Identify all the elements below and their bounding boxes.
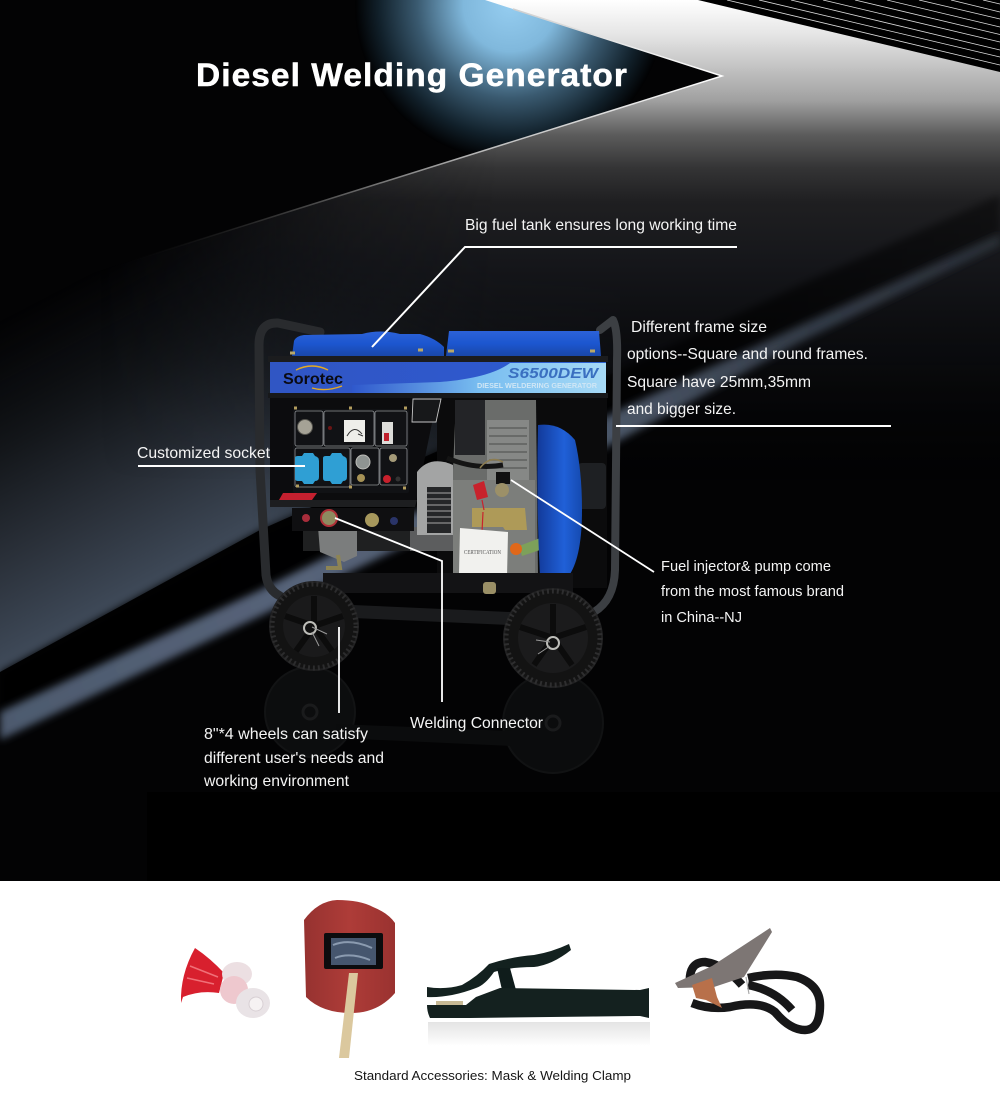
shelf bar <box>270 500 417 507</box>
callout: wheels: different user's needs and <box>204 750 384 767</box>
brass pump <box>472 508 527 530</box>
starter key <box>298 420 312 434</box>
title: Diesel Welding Generator <box>196 57 628 93</box>
control panel <box>293 408 409 493</box>
brand banner: Sorotec <box>283 371 343 388</box>
wedge edge highlights <box>128 9 722 262</box>
callout: frame size: Square have 25mm,35mm <box>627 374 811 391</box>
icon: clear nozzles <box>220 962 270 1018</box>
red tag <box>473 481 488 500</box>
main wedge shape <box>239 0 1000 442</box>
striped corner <box>698 0 1000 72</box>
accessories caption: Standard Accessories: Mask & Welding Clamp <box>354 1068 631 1083</box>
icon: welding mask <box>304 900 395 1058</box>
right wheel <box>504 589 602 687</box>
meter <box>344 420 365 442</box>
control housing <box>270 398 437 507</box>
callout: fuel tank <box>372 217 737 347</box>
mode switch and red button <box>389 454 397 462</box>
sockets <box>295 453 319 484</box>
fuel tank <box>292 332 444 356</box>
callout: fuel injector <box>511 480 844 626</box>
accessories panel <box>0 881 1000 1112</box>
dark diagonal band <box>0 195 1000 712</box>
callout: fuel injector: from the most famous brand <box>661 583 844 600</box>
callout: customized socket: Customized socket <box>137 445 271 462</box>
callout: fuel injector: in China--NJ <box>661 609 742 626</box>
cover bolts <box>290 350 595 353</box>
muffler <box>578 463 606 509</box>
engine bay backdrop <box>437 396 607 588</box>
breaker <box>382 422 393 444</box>
certification tag <box>459 528 508 577</box>
top rail <box>268 356 608 362</box>
light diagonal streak <box>0 235 1000 740</box>
panel bolts <box>294 408 407 488</box>
brand banner <box>270 362 606 393</box>
fuel pipe <box>447 458 503 466</box>
frame tubes <box>259 320 617 612</box>
knob <box>356 455 370 469</box>
red label <box>279 493 317 500</box>
engine block <box>447 400 558 577</box>
side cover <box>446 331 601 356</box>
warning sticker <box>412 399 441 422</box>
callout: welding connector <box>335 518 544 732</box>
welding terminal bar <box>292 508 414 531</box>
callout: wheels <box>203 627 384 790</box>
blue glow behind title <box>355 0 665 160</box>
callout: fuel injector: Fuel injector& pump come <box>661 558 831 575</box>
left wheel <box>270 582 358 670</box>
background panel <box>0 0 1000 744</box>
icon: electrode holder <box>427 944 650 1046</box>
brand banner: S6500DEW <box>508 365 600 382</box>
callout: welding connector: Welding Connector <box>410 715 544 732</box>
brand banner: DIESEL WELDERING GENERATOR <box>477 381 598 390</box>
green tag <box>519 532 558 556</box>
generator reflection <box>265 667 603 773</box>
callout: frame size <box>616 319 891 426</box>
icon: ground clamp <box>675 928 820 1030</box>
chassis rails <box>323 573 573 625</box>
generator <box>259 320 617 687</box>
blue fan cover <box>537 425 582 577</box>
alternator housing <box>303 461 453 568</box>
certification tag: CERTIFICATION <box>464 549 501 556</box>
icon: funnel <box>181 948 224 1003</box>
callout: frame size: and bigger size. <box>627 401 736 418</box>
callout: fuel tank: Big fuel tank ensures long working time <box>465 217 737 234</box>
slate diagonal haze <box>0 279 448 672</box>
callout: wheels: working environment <box>203 773 350 790</box>
callout: frame size: options--Square and round frames. <box>627 346 868 363</box>
callout: frame size: Different frame size <box>631 319 767 336</box>
orange cap <box>510 543 522 555</box>
callout: wheels: 8"*4 wheels can satisfy <box>204 726 368 743</box>
lower banner rail <box>268 393 608 398</box>
